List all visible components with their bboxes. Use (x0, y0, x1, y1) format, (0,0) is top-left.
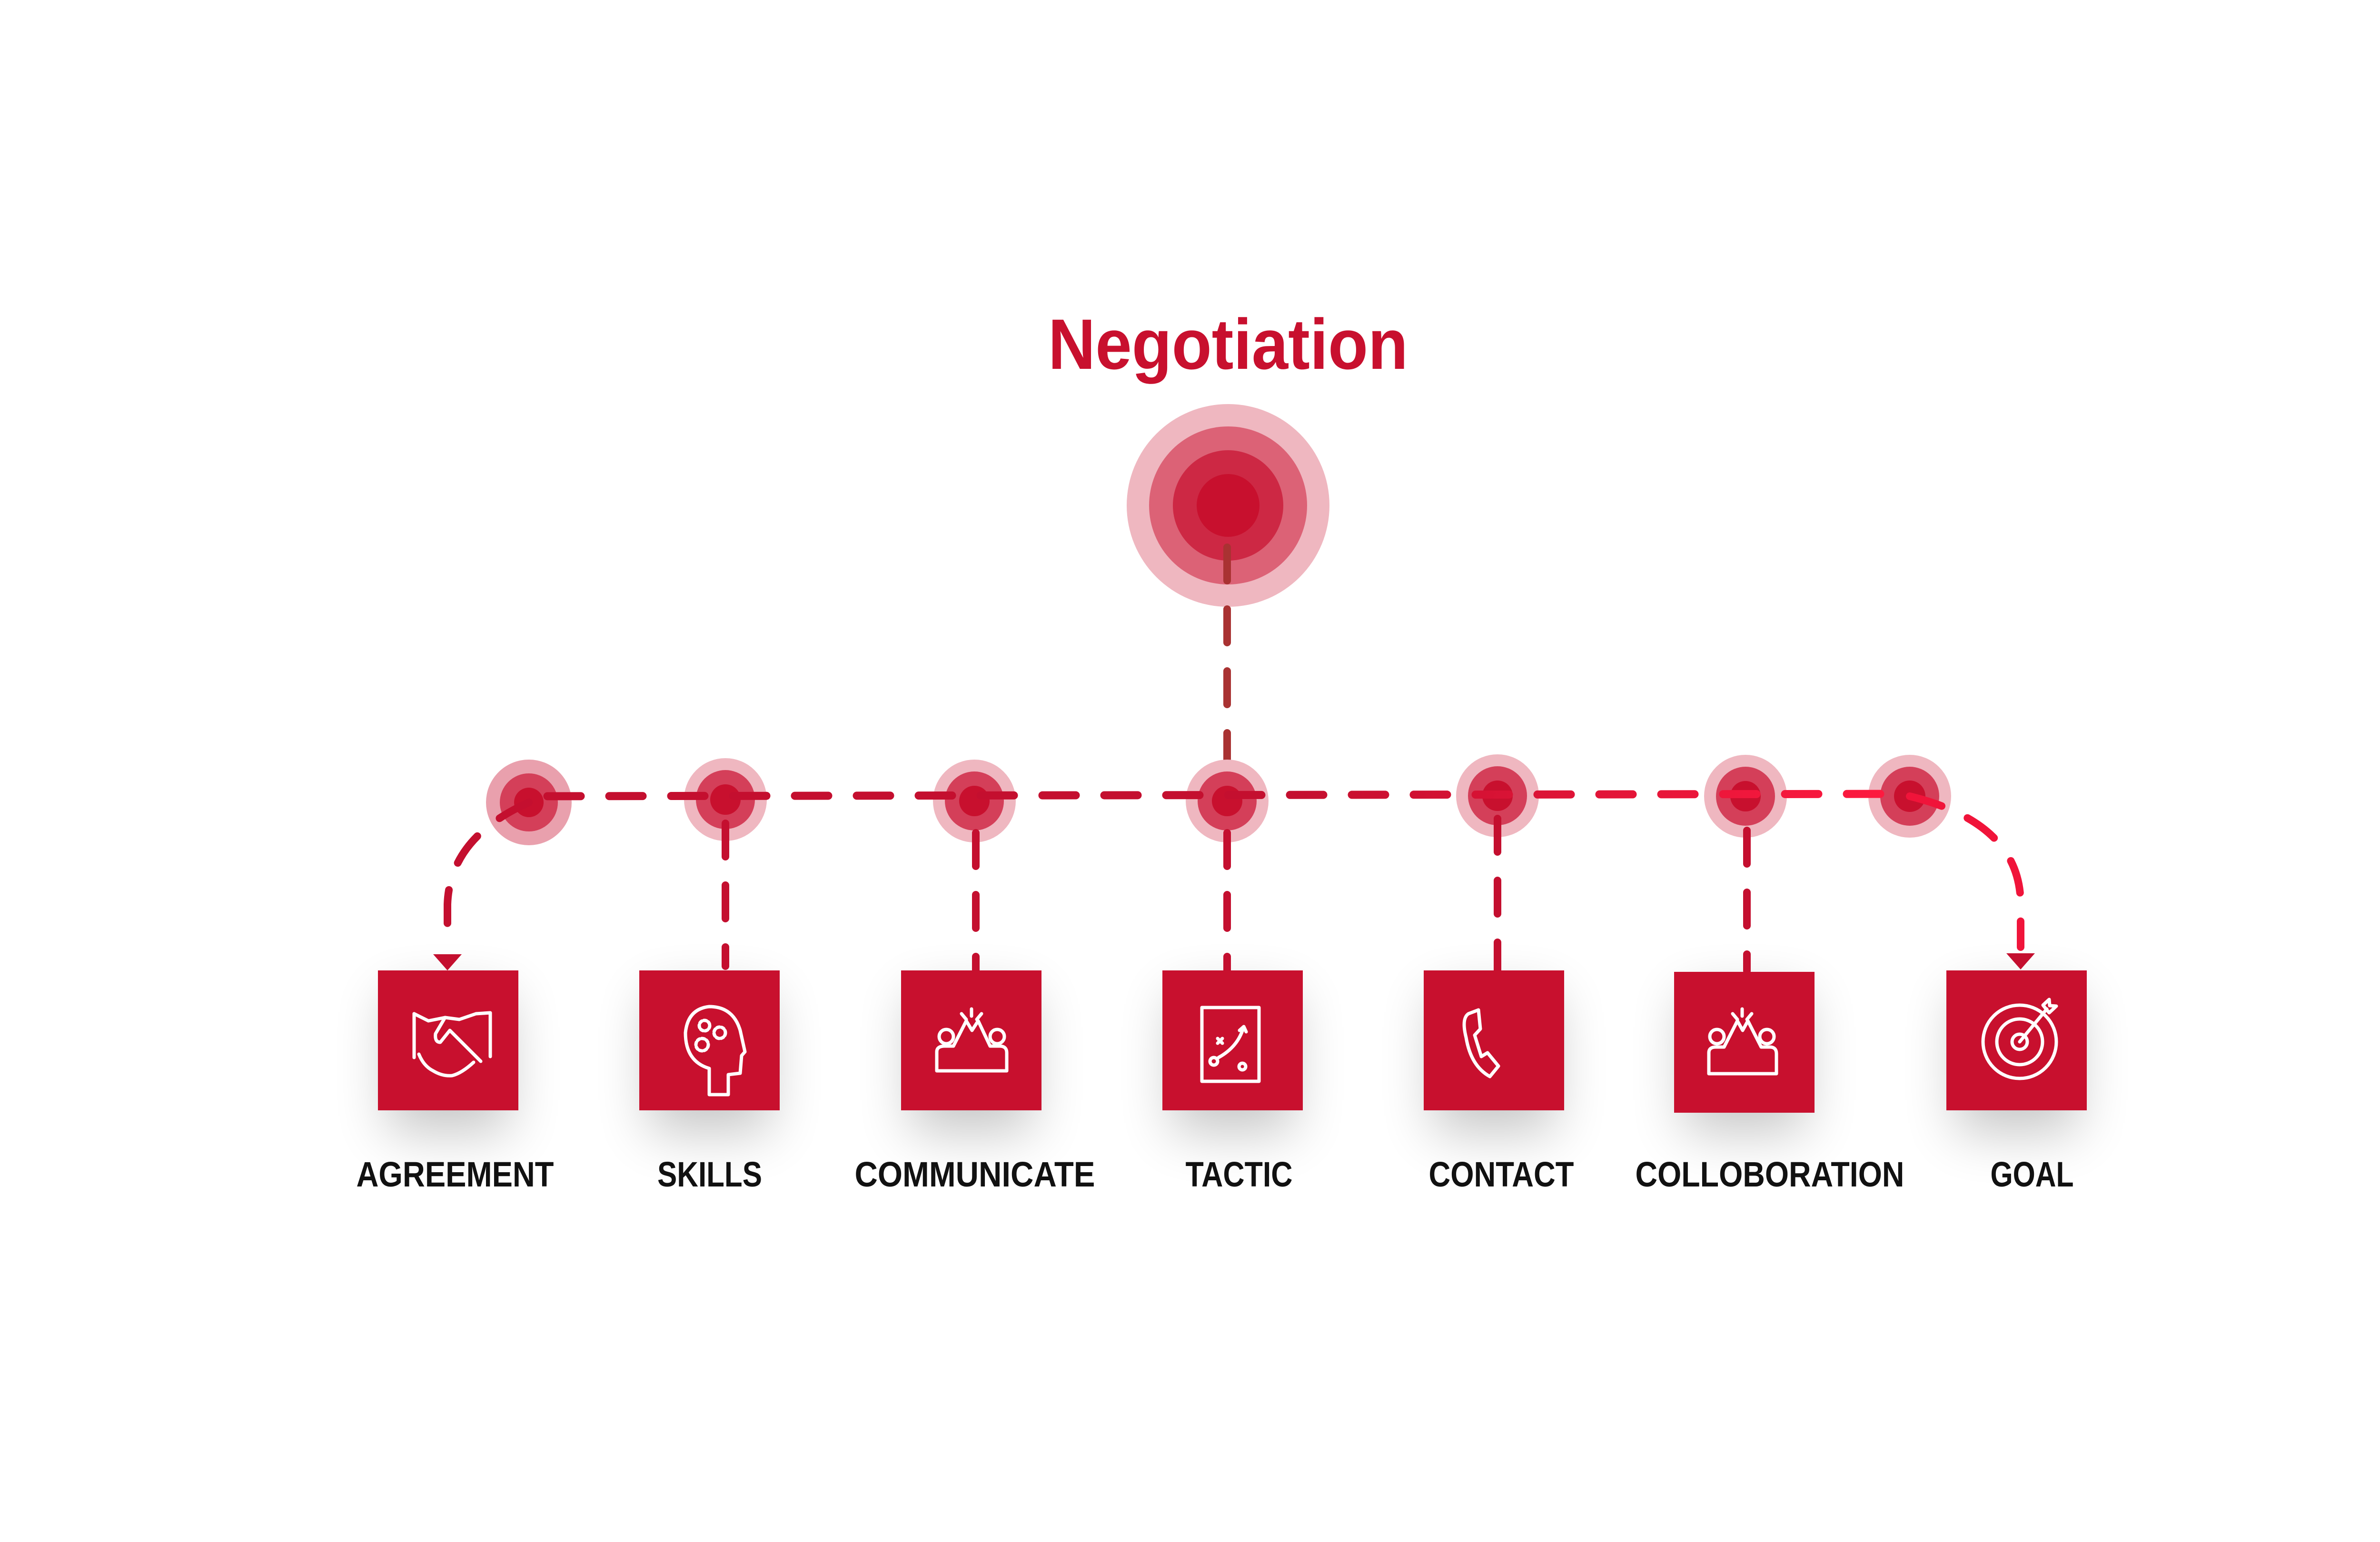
main node (1127, 404, 1329, 607)
icons (414, 999, 2056, 1095)
labels: CONTACT (1429, 1155, 1574, 1194)
labels: SKILLS (657, 1155, 762, 1194)
icon: phone (1464, 1010, 1498, 1077)
labels: AGREEMENT (356, 1155, 554, 1194)
icon: collaboration (1709, 1009, 1776, 1074)
labels: COLLOBORATION (1636, 1155, 1904, 1194)
labels: COMMUNICATE (855, 1155, 1095, 1194)
icon: tactic board (1202, 1008, 1259, 1081)
vertical dashed connectors (447, 796, 2021, 971)
connector: main to tactic (1223, 547, 1231, 761)
horizontal dashed connector (547, 794, 1904, 796)
icon: head gears (685, 1007, 745, 1095)
title: Negotiation (1048, 304, 1408, 384)
sub nodes (486, 754, 1951, 845)
labels: GOAL (1991, 1155, 2073, 1194)
arrowheads (433, 954, 462, 970)
icon: target (1983, 999, 2056, 1078)
icon: high five (937, 1009, 1007, 1071)
boxes (378, 970, 2087, 1113)
box shadows (387, 995, 2077, 1133)
labels (356, 1155, 2073, 1194)
labels: TACTIC (1185, 1155, 1293, 1194)
icon: handshake (414, 1013, 490, 1076)
